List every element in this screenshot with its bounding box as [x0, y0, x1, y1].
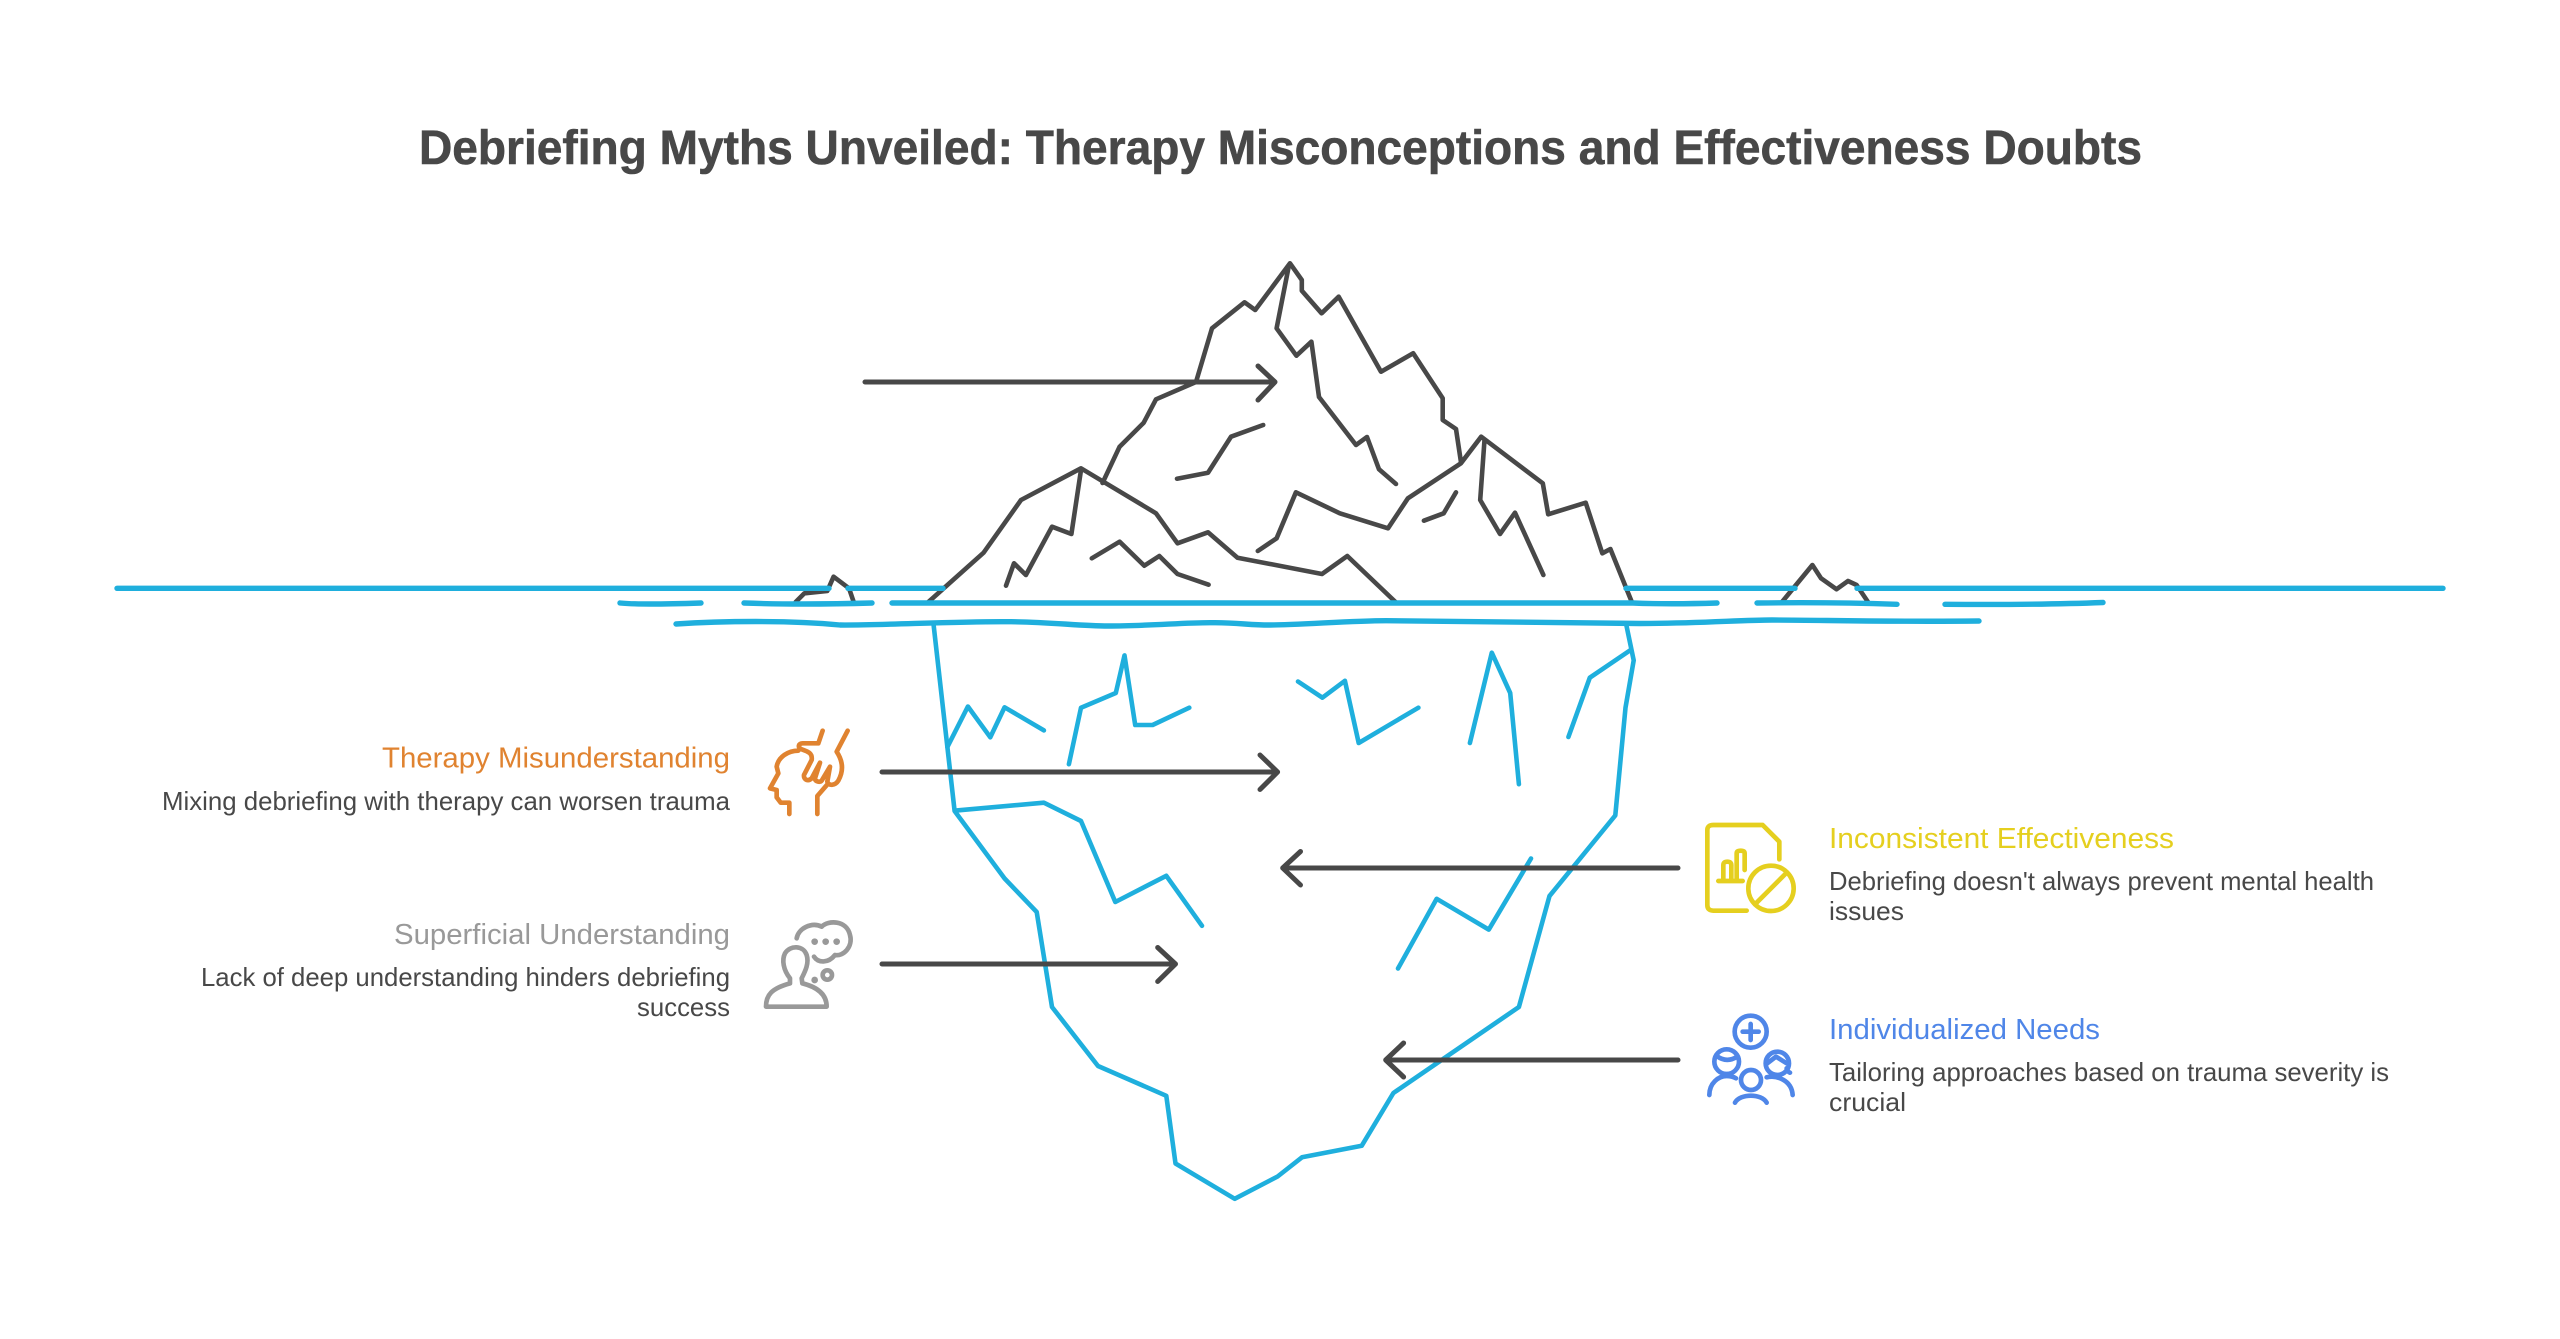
water surface lines [117, 588, 2443, 626]
text block: individualized needs: crucial [1829, 1087, 1906, 1117]
arrow: superficial understanding [882, 948, 1176, 982]
underwater crack 3 [1298, 681, 1418, 743]
text block: therapy misunderstanding: Mixing debriefing with therapy can worsen trauma [162, 786, 731, 816]
icon: group of people with plus [1709, 1016, 1793, 1103]
text block: therapy misunderstanding [162, 742, 731, 816]
text block: superficial understanding [201, 919, 730, 1022]
arrow: therapy misunderstanding [882, 755, 1278, 790]
title: Debriefing Myths Unveiled: Therapy Misconceptions and Effectiveness Doubts [419, 122, 2142, 175]
text block: therapy misunderstanding: Therapy Misunderstanding [382, 742, 730, 774]
text block: superficial understanding: success [637, 992, 730, 1022]
left peak outline [928, 468, 1396, 602]
text block: inconsistent effectiveness [1829, 823, 2374, 926]
underwater ridge [957, 803, 1202, 926]
text block: superficial understanding: Lack of deep understanding hinders debriefing [201, 962, 730, 992]
text block: inconsistent effectiveness: issues [1829, 896, 1904, 926]
underwater crack 1 [947, 706, 1044, 747]
icon: person with thought bubble [766, 922, 851, 1007]
text block: individualized needs: Individualized Needs [1829, 1014, 2100, 1046]
text block: inconsistent effectiveness: Inconsistent Effectiveness [1829, 823, 2174, 855]
small iceberg left [796, 577, 854, 602]
iceberg below water [934, 626, 1634, 1199]
icon: document with chart and prohibition sign [1707, 825, 1794, 911]
right peak crack [1424, 492, 1456, 521]
arrow: top [865, 366, 1275, 400]
text block: individualized needs: Tailoring approaches based on trauma severity is [1829, 1057, 2389, 1087]
text block: inconsistent effectiveness: Debriefing doesn't always prevent mental health [1829, 866, 2374, 896]
arrow: inconsistent effectiveness [1283, 852, 1678, 885]
underwater crack 5 [1568, 650, 1631, 737]
text block: superficial understanding: Superficial Understanding [394, 919, 730, 951]
underwater crack 6 [1398, 858, 1531, 968]
main peak crack [1177, 425, 1263, 479]
left peak inner ridge [1006, 470, 1081, 586]
small iceberg right [1782, 565, 1868, 602]
right peak inner ridge [1480, 440, 1543, 575]
text block: individualized needs [1829, 1014, 2389, 1117]
underwater crack 4 [1470, 653, 1519, 784]
iceberg above water [928, 263, 1632, 602]
underwater crack 2 [1069, 655, 1189, 764]
arrow: individualized needs [1386, 1043, 1678, 1077]
main peak outline [1102, 263, 1461, 483]
icon: head with hand [770, 731, 848, 814]
underwater outline [934, 626, 1634, 1199]
main peak inner ridge [1277, 265, 1396, 484]
right peak outline [1258, 437, 1632, 602]
left peak crack [1092, 542, 1209, 585]
